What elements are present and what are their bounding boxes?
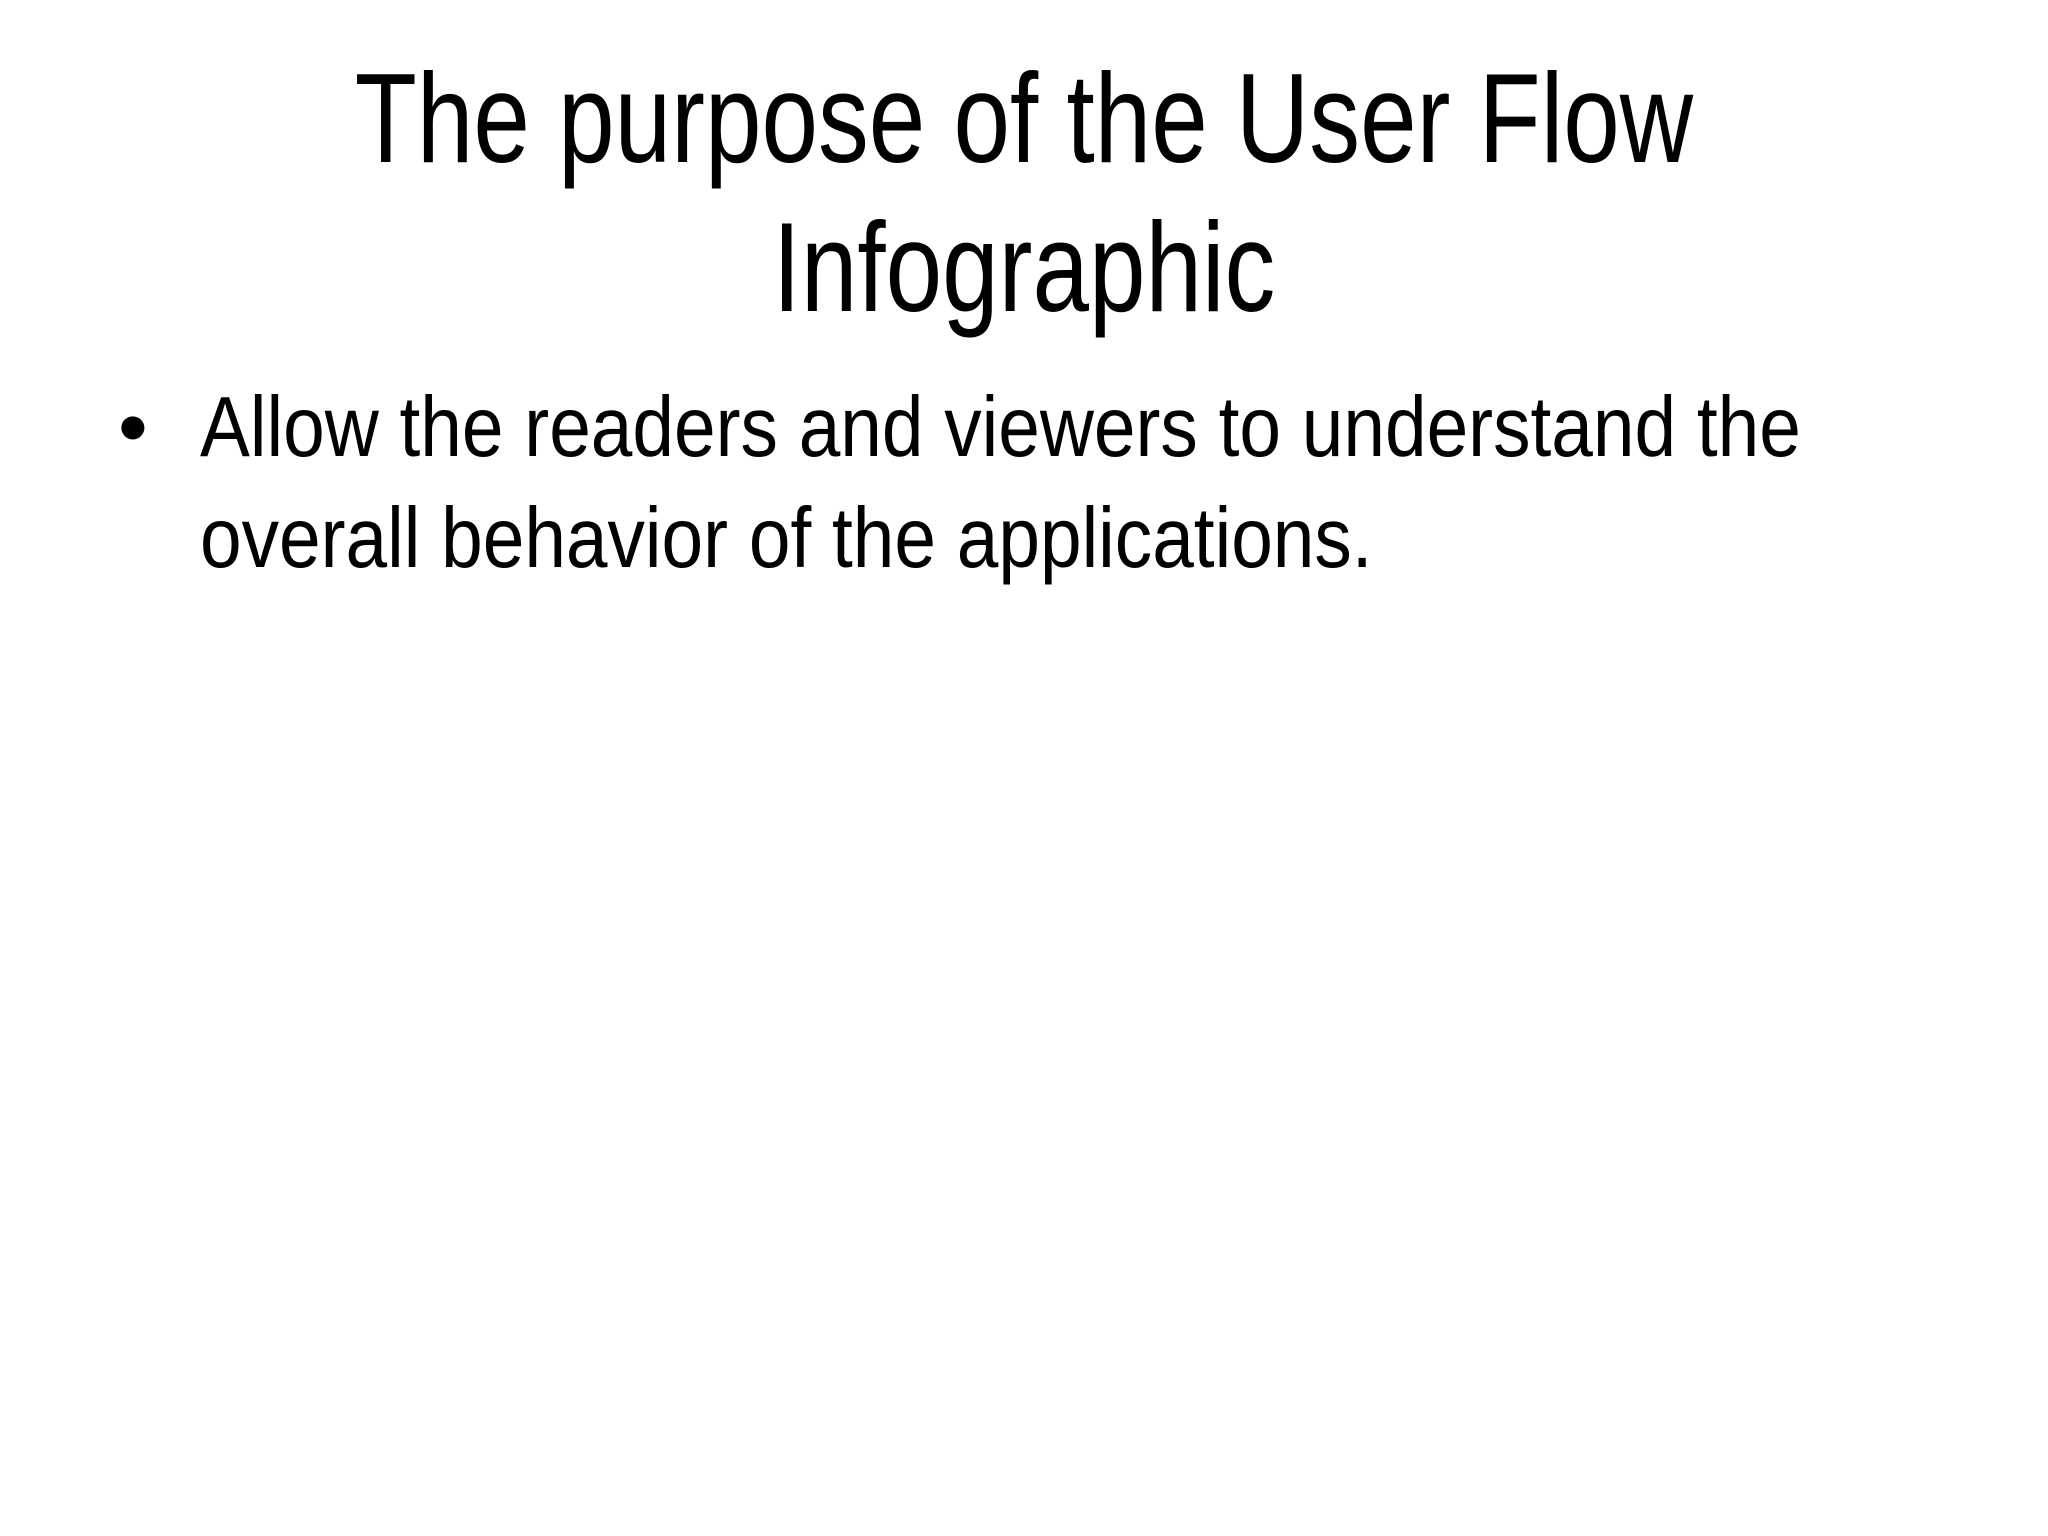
title [355, 47, 1694, 338]
bullet text [200, 380, 1801, 586]
bullet text: overall behavior of the applications. [200, 491, 1373, 586]
bullet text: Allow the readers and viewers to understand the [200, 380, 1801, 475]
title: Infographic [773, 196, 1275, 338]
title: The purpose of the User Flow [355, 47, 1693, 189]
bullet marker: • [118, 380, 148, 475]
